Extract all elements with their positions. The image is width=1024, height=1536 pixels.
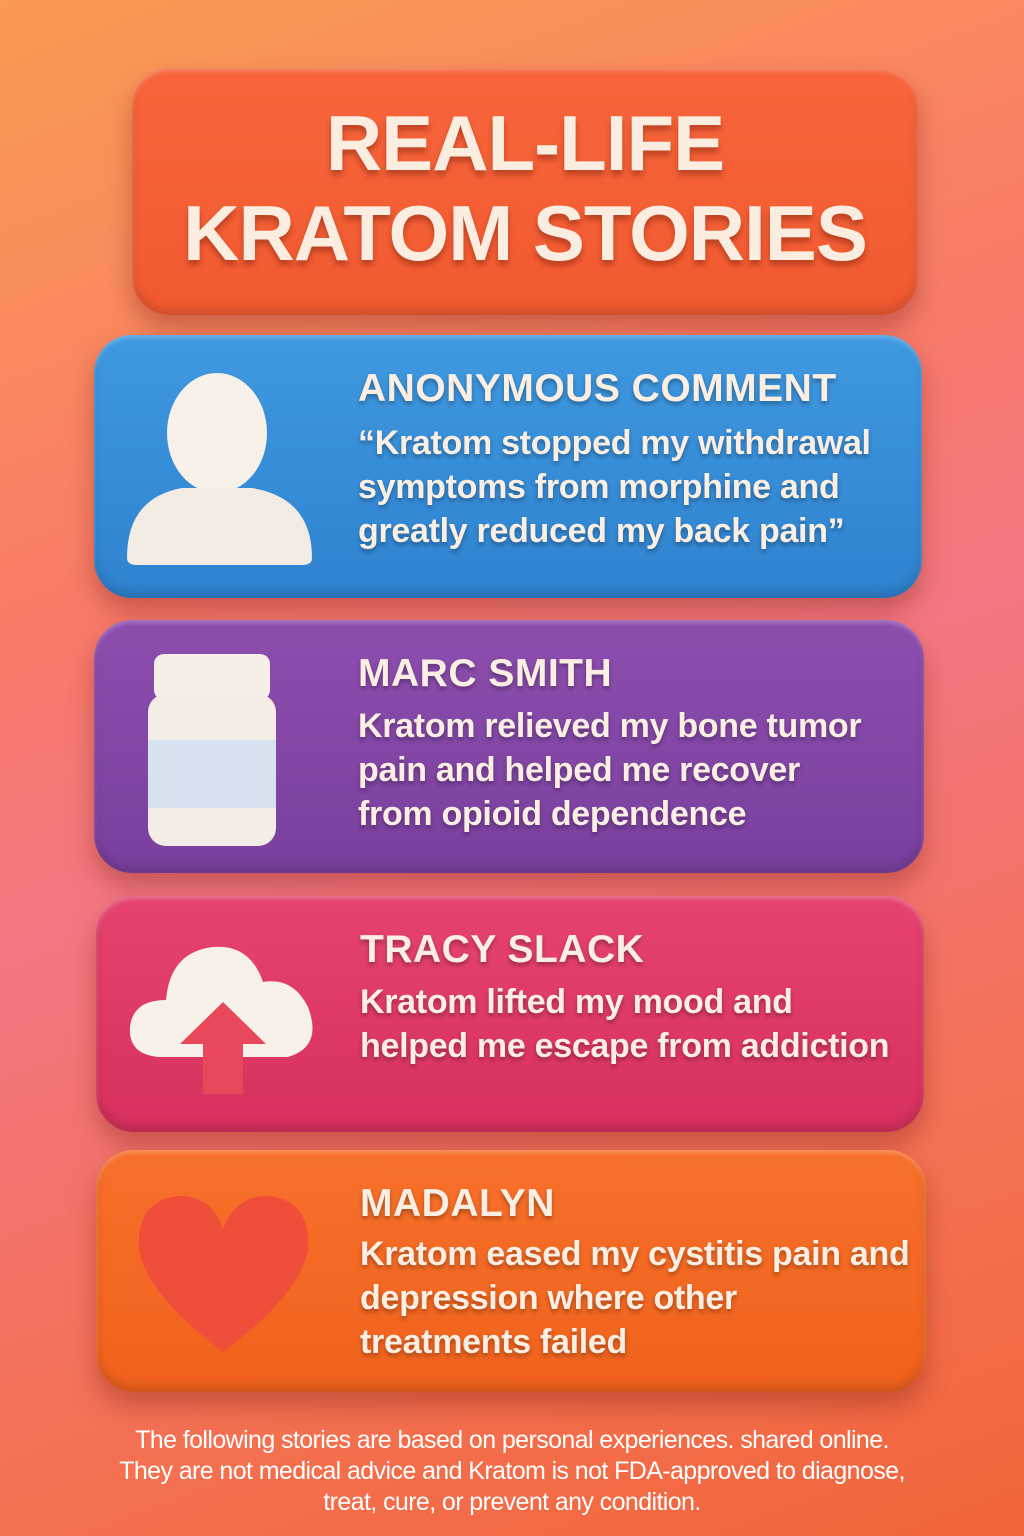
story text: pain and helped me recover <box>358 751 800 789</box>
icon: person <box>127 373 312 565</box>
disclaimer footer <box>119 1426 905 1516</box>
title <box>183 99 868 277</box>
story text <box>358 707 862 836</box>
panel: anonymous comment <box>94 335 922 598</box>
quote text: “Kratom stopped my withdrawal <box>358 424 871 462</box>
story text: Kratom lifted my mood and <box>360 983 793 1021</box>
story text: treatments failed <box>360 1323 627 1361</box>
quote text: greatly reduced my back pain” <box>358 512 844 550</box>
story text: Kratom relieved my bone tumor <box>358 707 861 745</box>
title: REAL-LIFE <box>326 99 724 187</box>
icon: cloud upload <box>130 946 312 1094</box>
panel: madalyn <box>96 1150 926 1392</box>
quote text: symptoms from morphine and <box>358 468 839 506</box>
story text: Kratom eased my cystitis pain and <box>360 1235 909 1273</box>
panel: tracy slack <box>96 896 924 1132</box>
icon: pill bottle <box>148 654 276 846</box>
title panel <box>132 68 918 315</box>
disclaimer footer: They are not medical advice and Kratom is not FDA-approved to diagnose, <box>119 1457 905 1485</box>
heading: MADALYN <box>360 1182 555 1225</box>
story text <box>358 1235 910 1361</box>
panel: marc smith <box>94 620 924 873</box>
heading: MARC SMITH <box>358 652 612 695</box>
story text: helped me escape from addiction <box>360 1027 889 1065</box>
icon: heart <box>138 1196 308 1352</box>
story text <box>360 983 890 1069</box>
quote text <box>357 424 871 554</box>
title: KRATOM STORIES <box>183 189 867 277</box>
disclaimer footer: treat, cure, or prevent any condition. <box>323 1488 701 1516</box>
story text: from opioid dependence <box>358 795 746 833</box>
disclaimer footer: The following stories are based on personal experiences. shared online. <box>135 1426 889 1454</box>
heading: TRACY SLACK <box>360 928 644 971</box>
heading: ANONYMOUS COMMENT <box>358 367 837 410</box>
story text: depression where other <box>360 1279 737 1317</box>
